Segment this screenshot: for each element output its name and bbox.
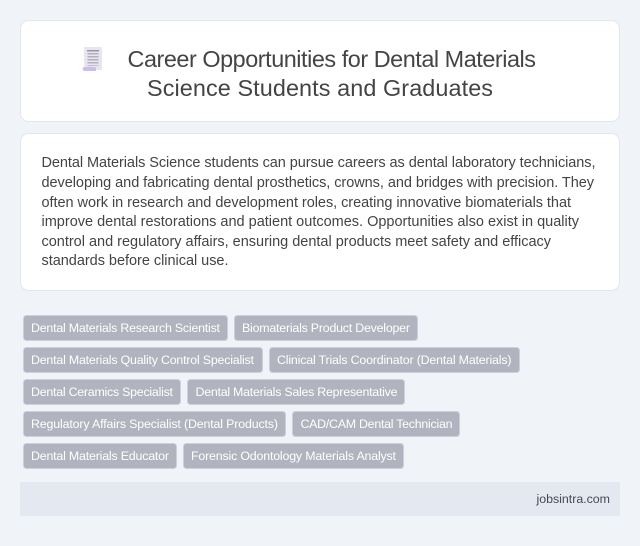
text block: description: control and regulatory affairs, ensuring dental products meet safety and efficacy (42, 234, 552, 250)
text block: description: often work in research and development roles, creating innovative biomaterials that (42, 195, 571, 211)
text block: description (42, 155, 596, 269)
tag: Dental Materials Research Scientist (24, 316, 228, 340)
tag: Regulatory Affairs Specialist: Regulatory Affairs Specialist (Dental Products) (31, 417, 278, 431)
panel: description card (20, 134, 620, 290)
tag: Dental Ceramics Specialist: Dental Ceramics Specialist (31, 385, 174, 399)
text block: description: developing and fabricating dental prosthetics, crowns, and bridges with precision. They (42, 175, 595, 191)
tag: CAD/CAM Dental Technician (292, 412, 460, 436)
text block: description: Dental Materials Science students can pursue careers as dental laboratory technicians, (42, 155, 596, 171)
title (128, 46, 536, 101)
title: Career Opportunities for Dental Materials (128, 46, 536, 72)
panel: header card (20, 20, 620, 122)
tag: Dental Materials Research Scientist: Dental Materials Research Scientist (31, 321, 221, 335)
text block: description: standards before clinical use. (42, 253, 228, 269)
tag: Dental Materials Sales Representative: Dental Materials Sales Representative (196, 385, 398, 399)
tag: Forensic Odontology Materials Analyst (184, 444, 404, 468)
tag: Dental Materials Quality Control Specialist: Dental Materials Quality Control Specialist (31, 353, 255, 367)
footer bar (20, 482, 620, 516)
footer source text: jobsintra.com (536, 492, 610, 506)
tag: Clinical Trials Coordinator: Clinical Trials Coordinator (Dental Materials) (277, 353, 512, 367)
tag: Dental Ceramics Specialist (24, 380, 180, 404)
tag: Dental Materials Educator: Dental Materials Educator (31, 449, 169, 463)
icon: document scroll (82, 47, 102, 71)
tag: Forensic Odontology Materials Analyst: Forensic Odontology Materials Analyst (191, 449, 397, 463)
title: Science Students and Graduates (147, 75, 493, 101)
tag: Dental Materials Educator (24, 444, 176, 468)
tag: Biomaterials Product Developer: Biomaterials Product Developer (242, 321, 410, 335)
text block: description: improve dental restorations and patient outcomes. Opportunities also exist in quality (42, 214, 580, 230)
tag: Dental Materials Sales Representative (188, 380, 404, 404)
tag: Clinical Trials Coordinator (270, 348, 520, 372)
tag: CAD/CAM Dental Technician: CAD/CAM Dental Technician (300, 417, 453, 431)
tag: Regulatory Affairs Specialist (24, 412, 286, 436)
tag: Biomaterials Product Developer (234, 316, 418, 340)
tag list: career roles (24, 316, 520, 468)
tag: Dental Materials Quality Control Specialist (24, 348, 262, 372)
